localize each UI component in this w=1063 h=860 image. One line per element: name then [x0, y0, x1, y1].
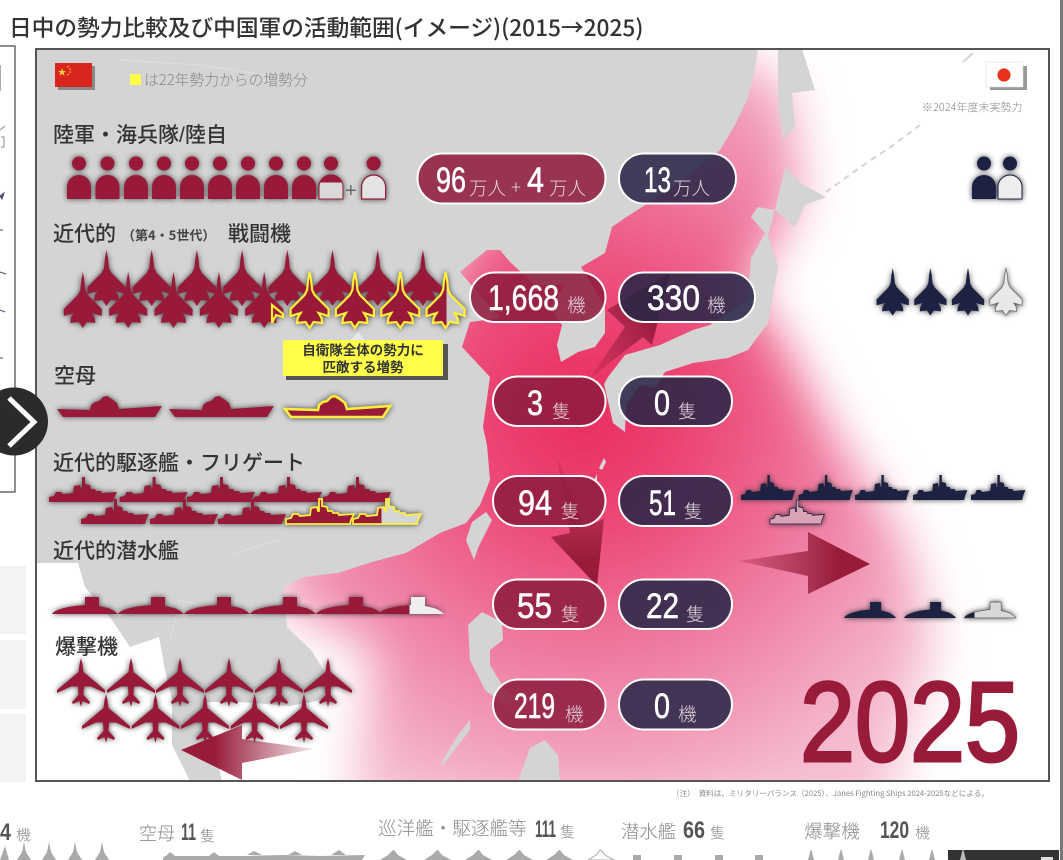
callout: increase: 自衛隊全体の勢力に	[302, 339, 424, 359]
pill: china submarines: 55	[517, 587, 552, 626]
source note: （注） 資料は、ミリタリーバランス（2025）、Janes Fighting Ships 2024-2025などによる。	[672, 788, 989, 799]
pill: japan destroyers: 隻	[684, 498, 703, 524]
icons: china destroyers	[49, 477, 421, 524]
pill: china fighters: 機	[567, 292, 586, 318]
heading: destroyers: 近代的駆逐艦・フリゲート	[53, 452, 305, 475]
bottom label: cruisers and destroyers: 巡洋艦・駆逐艦等	[378, 814, 527, 841]
land: Taiwan	[466, 512, 492, 560]
bottom icons: grey fleet	[0, 842, 935, 860]
pill: japan fighters	[619, 272, 755, 322]
arrow: west	[181, 725, 314, 780]
icons: japan destroyers	[741, 475, 1025, 524]
bottom label: bombers: 120	[880, 817, 909, 844]
pill: japan submarines: 22	[646, 587, 679, 626]
Kuril islands	[826, 125, 920, 192]
pill: japan carriers	[619, 376, 732, 426]
neighbouring grey boxes	[0, 566, 26, 782]
icons: china personnel	[67, 156, 386, 199]
heading: carriers: 空母	[54, 365, 96, 388]
heading: bombers: 爆撃機	[55, 636, 118, 659]
title: 日中の勢力比較及び中国軍の活動範囲(イメージ)(2015→2025)	[9, 10, 643, 43]
bottom label: carriers: 空母	[139, 820, 175, 846]
pill: china destroyers	[493, 476, 606, 526]
bottom label: fighters: 4	[0, 819, 12, 846]
pill: china carriers: 3	[527, 384, 543, 423]
icons: japan submarines	[844, 602, 1016, 618]
heading: ground forces: 陸軍・海兵隊/陸自	[53, 124, 227, 147]
pill: china carriers	[493, 376, 606, 426]
pill: japan fighters: 330	[647, 279, 700, 318]
bottom label: cruisers and destroyers: 隻	[560, 821, 575, 842]
land: Philippines	[468, 612, 520, 705]
pill: china personnel: 万人	[469, 175, 506, 201]
pill: japan bombers	[619, 680, 732, 730]
icons: japan fighters	[877, 268, 1022, 316]
bottom label: submarines: 66	[683, 817, 705, 844]
pill: japan destroyers: 51	[649, 484, 676, 523]
pill: japan bombers: 0	[654, 687, 670, 726]
pill: china destroyers: 94	[518, 484, 552, 523]
japan flag	[986, 62, 1027, 90]
pill: china destroyers: 隻	[561, 498, 580, 524]
pill: china submarines: 隻	[561, 601, 580, 627]
bottom label: submarines: 隻	[710, 822, 725, 843]
heading: submarines: 近代的潜水艦	[53, 540, 179, 563]
bottom label: submarines	[621, 817, 725, 844]
china flag	[55, 63, 95, 90]
icons: japan personnel	[972, 156, 1022, 199]
rivers	[120, 60, 300, 690]
pill: china fighters: 1,668	[488, 279, 559, 318]
pill: japan destroyers	[619, 476, 732, 526]
plus sign: +	[345, 180, 357, 202]
heading: fighters: 近代的	[53, 223, 116, 246]
pill: japan bombers: 機	[678, 701, 697, 727]
bottom label: carriers	[139, 819, 215, 846]
pill: china personnel	[418, 154, 606, 204]
pill: china bombers: 機	[565, 701, 584, 727]
bottom label: fighters: 機	[16, 824, 31, 845]
pill: japan personnel: 万人	[673, 175, 710, 201]
pill: japan personnel	[619, 154, 736, 204]
bottom label: carriers: 隻	[200, 825, 215, 846]
bottom label: bombers: 爆撃機	[804, 817, 860, 844]
pill: china personnel: 万人	[549, 175, 586, 201]
arrow: north-east	[590, 273, 670, 378]
arrow: south	[551, 453, 604, 586]
callout: increase	[283, 332, 448, 380]
pill: china bombers: 219	[514, 687, 555, 726]
pill: china carriers: 隻	[552, 398, 571, 424]
page edge	[1060, 0, 1063, 860]
arrow: east	[739, 532, 870, 594]
pill: china personnel: +	[511, 174, 521, 200]
pink activity range	[265, 30, 935, 810]
pill: japan personnel: 13	[644, 161, 671, 200]
pill: japan fighters: 機	[707, 292, 726, 318]
pill: china submarines	[493, 580, 606, 629]
callout: increase: 匹敵する増勢	[322, 356, 404, 376]
left neighbouring panel	[0, 46, 15, 492]
land: Sakhalin	[778, 49, 815, 140]
bottom label: cruisers and destroyers: 111	[535, 816, 556, 843]
heading: fighters: （第4・5世代）	[122, 225, 215, 244]
heading: fighters	[53, 223, 291, 246]
pill: china personnel: 96	[436, 161, 466, 200]
icons: china bombers	[57, 658, 352, 743]
bottom label: submarines: 潜水艦	[621, 818, 676, 844]
pill: china personnel: 4	[527, 161, 544, 200]
icons: china submarines	[52, 597, 444, 614]
pill: china bombers	[493, 680, 606, 730]
pill: japan submarines	[619, 580, 732, 629]
legend: は22年勢力からの増勢分	[144, 69, 308, 90]
heading: fighters: 戦闘機	[228, 223, 291, 246]
land: Asian mainland	[36, 49, 758, 781]
year label: 2025	[800, 659, 1020, 785]
land: Ryukyu	[594, 458, 606, 481]
note: japan figures: ※2024年度末実勢力	[922, 99, 1023, 115]
icons: china fighters	[64, 250, 465, 328]
next button	[0, 388, 48, 456]
bottom dark box	[948, 850, 1059, 860]
pill: japan carriers: 隻	[678, 398, 697, 424]
pill: japan submarines: 隻	[686, 601, 705, 627]
bottom label: carriers: 11	[181, 819, 196, 846]
pill: japan carriers: 0	[654, 384, 670, 423]
icons: china carriers	[57, 396, 390, 417]
bottom label: fighters	[0, 819, 31, 846]
pill: china fighters	[470, 272, 606, 322]
land: Japan	[604, 167, 826, 432]
bottom label: bombers: 機	[915, 822, 930, 843]
bottom label: bombers	[804, 817, 930, 844]
